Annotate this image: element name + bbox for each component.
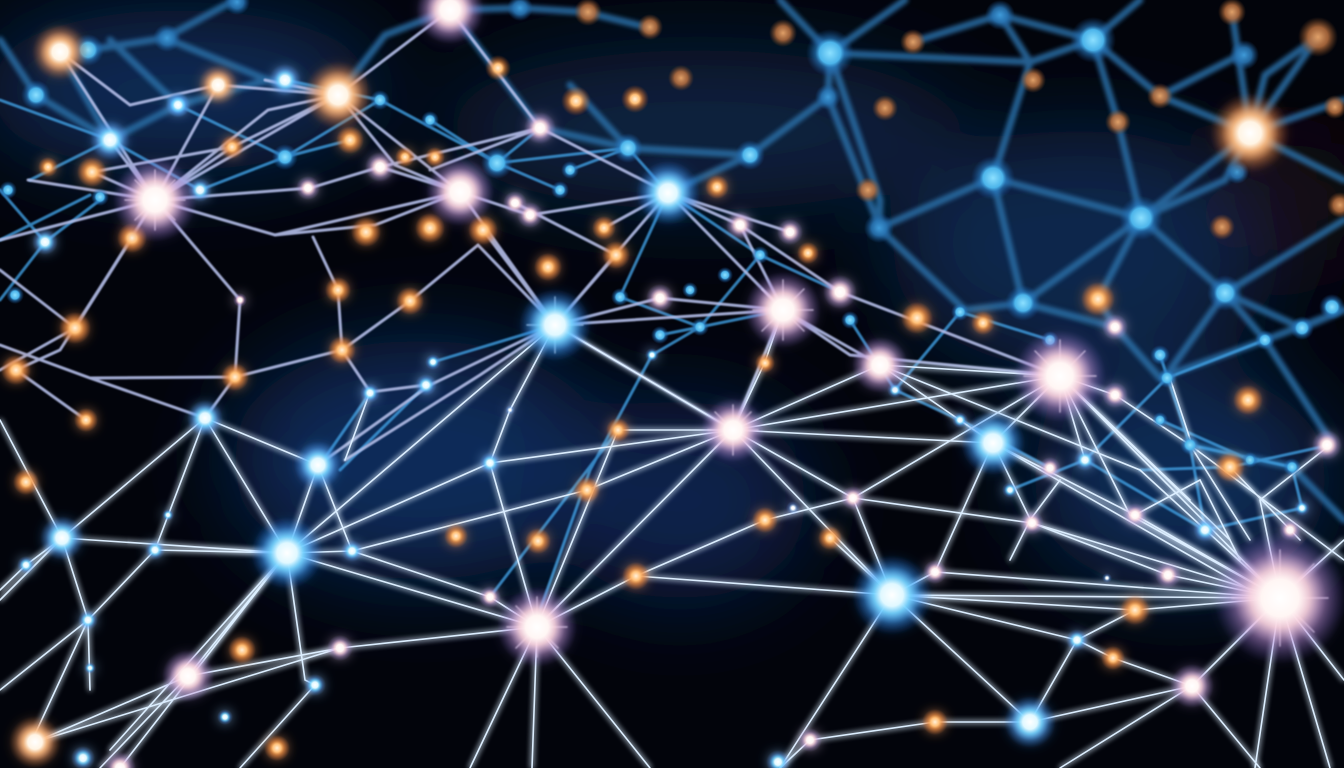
far network: blurred thick blue links [0, 0, 1344, 520]
nodes: small amber sparks [1, 126, 1263, 761]
mid network: lilac upper-left links [0, 10, 1060, 465]
nodes: dim blurred blue and amber [0, 0, 1344, 476]
mid network: blue links across the dense band [0, 80, 1330, 610]
near network: bright thin white-blue links [0, 310, 1344, 768]
hub star rays [125, 170, 1328, 657]
